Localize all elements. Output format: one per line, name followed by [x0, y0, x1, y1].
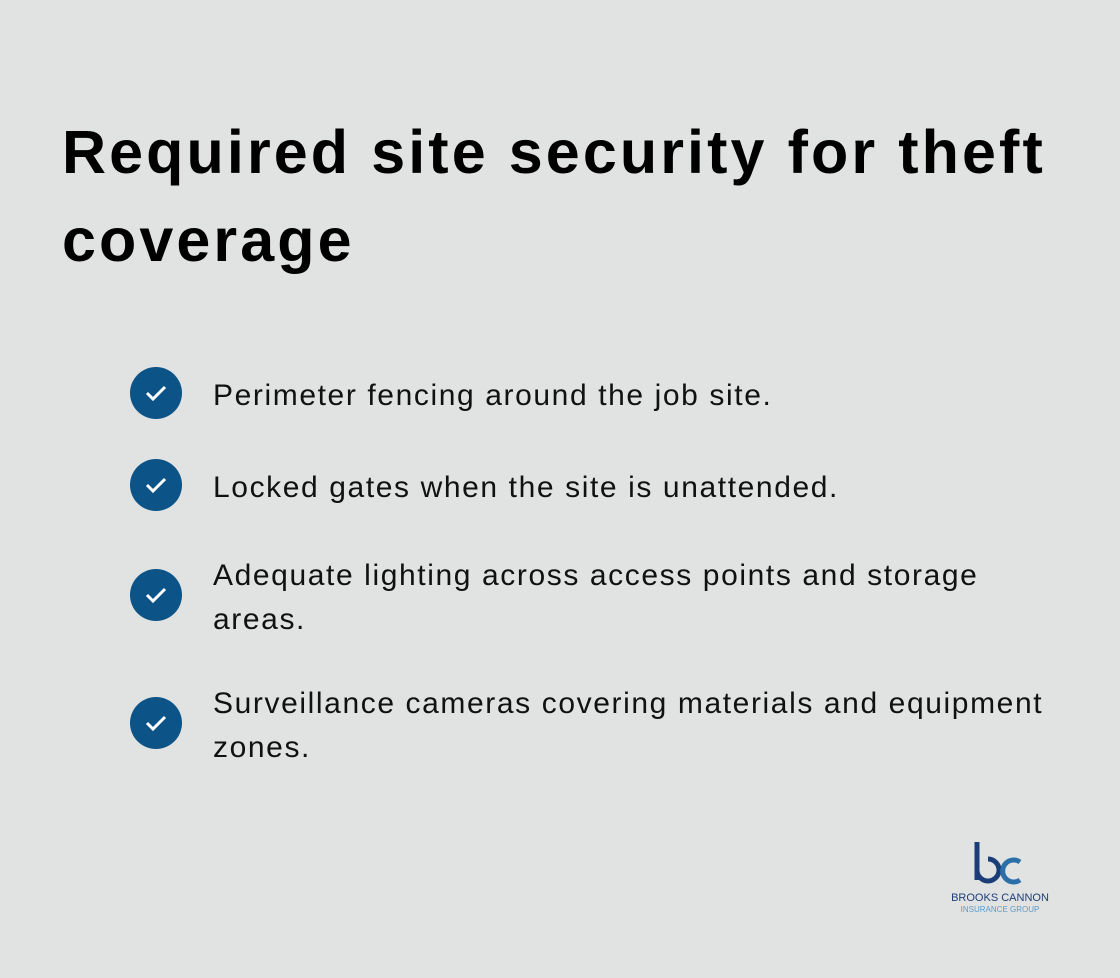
logo: INSURANCE GROUP: [961, 905, 1039, 914]
text 4: Surveillance cameras covering materials and equipment: [213, 687, 1043, 720]
item 1: [130, 367, 772, 419]
icon: check: [130, 569, 182, 621]
item 3: [130, 559, 978, 636]
icon: check: [130, 459, 182, 511]
title: coverage: [62, 206, 355, 274]
logo: BROOKS CANNON: [951, 892, 1049, 904]
title: [62, 118, 1046, 274]
logo: [951, 842, 1049, 914]
text 3: Adequate lighting across access points and storage: [213, 559, 978, 592]
text 3: [213, 559, 978, 636]
icon: check: [130, 367, 182, 419]
text 1: Perimeter fencing around the job site.: [213, 379, 772, 412]
text 2: Locked gates when the site is unattended.: [213, 471, 839, 504]
icon: check: [130, 697, 182, 749]
text 3: areas.: [213, 603, 306, 636]
title: Required site security for theft: [62, 118, 1046, 186]
text 4: [213, 687, 1043, 764]
text 4: zones.: [213, 731, 311, 764]
item 4: [130, 687, 1043, 764]
item 2: [130, 459, 839, 511]
